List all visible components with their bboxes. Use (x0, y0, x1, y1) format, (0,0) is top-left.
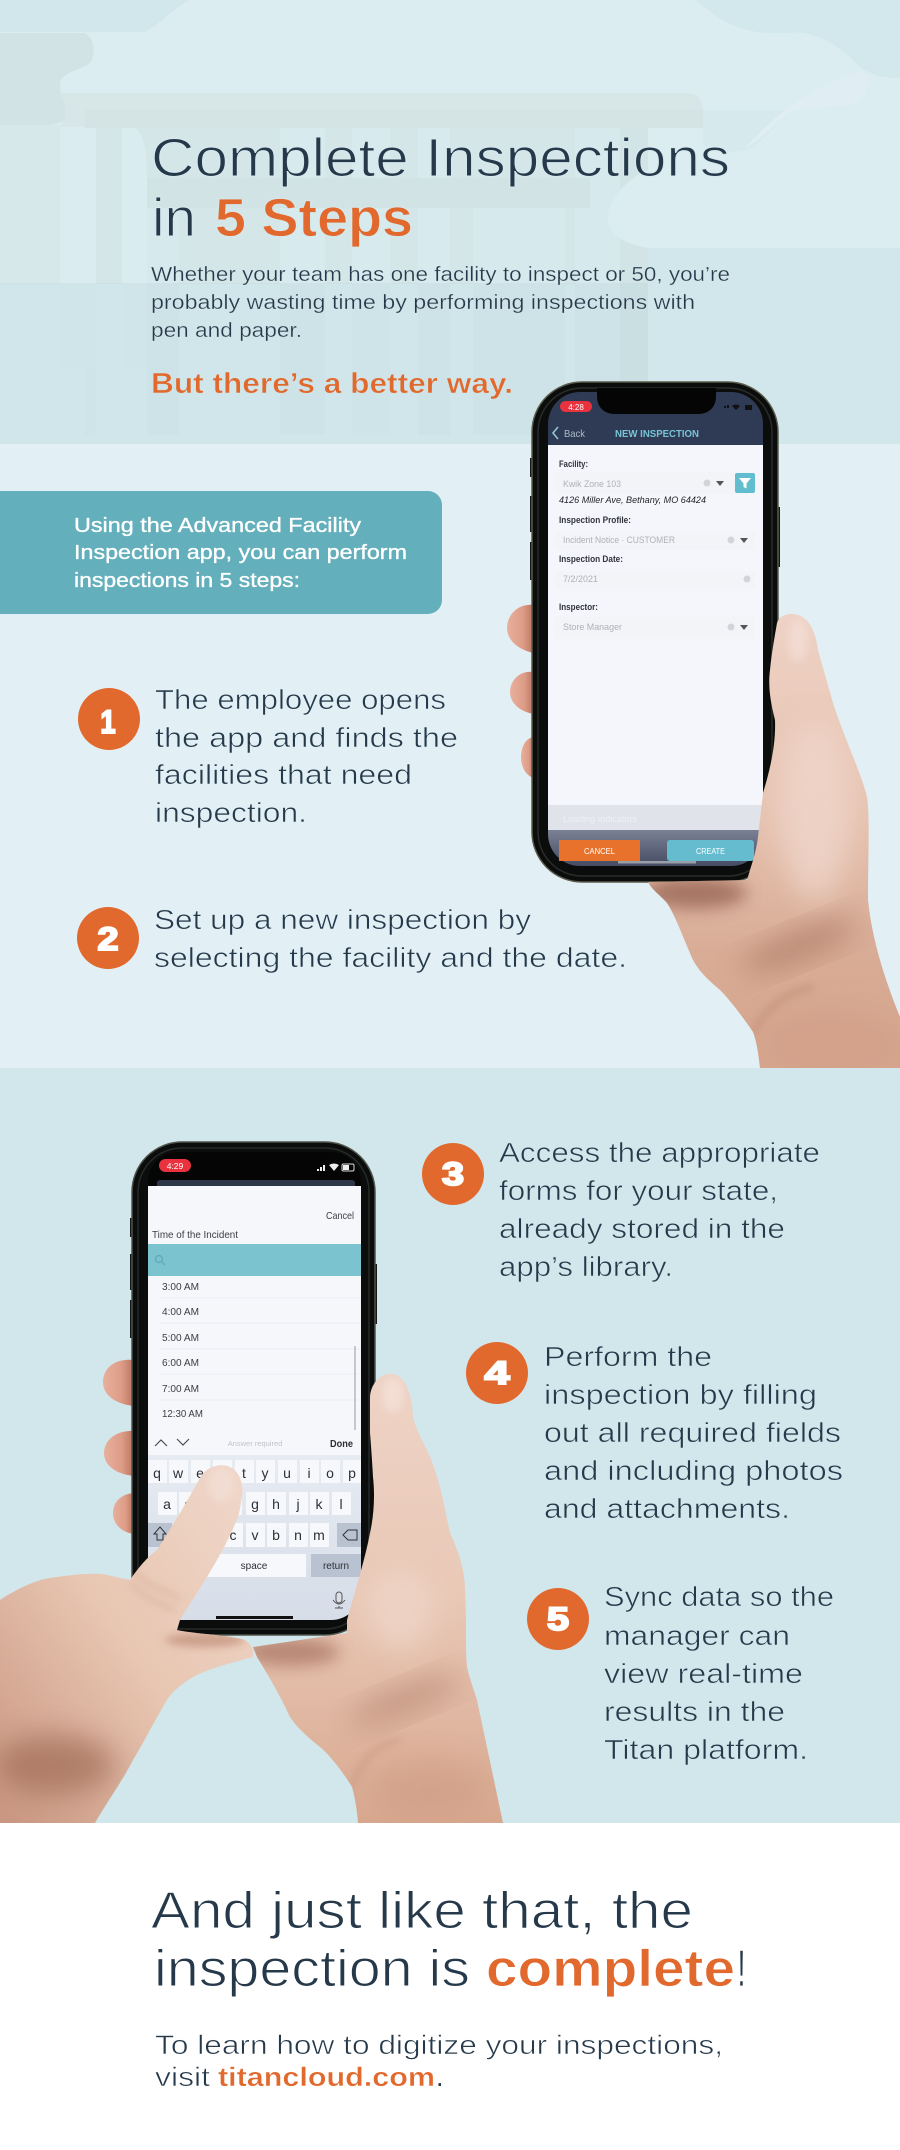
step 4: inspection by filling (544, 1379, 817, 1410)
step 1: facilities that need (155, 759, 412, 790)
intro paragraph: probably wasting time by performing inspections with (151, 291, 695, 314)
phone: time picker screen with keyboard: q (153, 1465, 161, 1481)
phone: new inspection screen: Incident Notice · CUSTOMER (563, 535, 675, 546)
call to action: To learn how to digitize your inspections, (155, 2030, 723, 2060)
title: in (152, 188, 196, 248)
callout: using the app: inspections in 5 steps: (74, 569, 300, 592)
callout: using the app: Inspection app, you can perform (74, 541, 407, 564)
phone: time picker screen with keyboard: m (313, 1527, 325, 1543)
phone: time picker screen with keyboard: w (172, 1465, 184, 1481)
phone: time picker screen with keyboard: 7:00 AM (162, 1383, 199, 1395)
step 4: out all required fields (544, 1417, 841, 1448)
phone: time picker screen with keyboard: v (252, 1527, 258, 1543)
phone: time picker screen with keyboard: b (272, 1527, 280, 1543)
phone: time picker screen with keyboard: n (294, 1527, 302, 1543)
phone: time picker screen with keyboard: c (230, 1527, 236, 1543)
phone: time picker screen with keyboard: d (206, 1496, 214, 1512)
closing headline: inspection is (154, 1940, 470, 1998)
phone: time picker screen with keyboard: return (323, 1561, 349, 1572)
panel: light section background (0, 444, 900, 1068)
phone: time picker screen with keyboard: r (220, 1465, 225, 1481)
subheading: but there's a better way: But there’s a better way. (151, 368, 513, 400)
step 4: and attachments. (544, 1493, 790, 1524)
step 1: 1 (100, 704, 116, 740)
step 1: inspection. (155, 797, 307, 828)
step 4 (466, 1341, 843, 1524)
title: Complete Inspections (151, 128, 730, 188)
icon: fingers behind first phone (507, 605, 534, 778)
call to action: visit (155, 2062, 211, 2092)
phone: new inspection screen: CREATE (696, 846, 725, 856)
phone: time picker screen with keyboard: 12:30 AM (162, 1408, 203, 1420)
call to action: . (436, 2062, 444, 2092)
phone: time picker screen with keyboard: k (316, 1496, 324, 1512)
phone: new inspection screen: 4:28 (568, 403, 584, 412)
phone: new inspection screen: 4126 Miller Ave, Bethany, MO 64424 (559, 495, 706, 506)
phone: new inspection screen: Facility: (559, 459, 588, 469)
closing headline (151, 1882, 746, 1998)
panel: header background with building illustration (0, 0, 900, 444)
phone: time picker screen with keyboard: l (339, 1496, 343, 1512)
step 4: 4 (484, 1355, 510, 1391)
phone: time picker screen with keyboard: 4:00 AM (162, 1306, 199, 1318)
phone: time picker screen with keyboard: t (242, 1465, 246, 1481)
phone: time picker screen with keyboard (130, 1142, 377, 1635)
title: 5 Steps (215, 188, 413, 248)
step 5: results in the (604, 1696, 785, 1727)
step 4: and including photos (544, 1455, 843, 1486)
phone: time picker screen with keyboard: 6:00 AM (162, 1357, 199, 1369)
phone: time picker screen with keyboard: g (251, 1496, 259, 1512)
step 3: Access the appropriate (499, 1137, 820, 1168)
step 2: Set up a new inspection by (154, 904, 531, 935)
phone: new inspection screen: Inspection Profile: (559, 515, 631, 525)
panel: teal section background (0, 1068, 900, 1823)
icon: fingers behind second phone (103, 1360, 134, 1534)
closing headline: complete (486, 1940, 735, 1998)
phone: time picker screen with keyboard: f (230, 1496, 234, 1512)
phone: time picker screen with keyboard: space (241, 1561, 268, 1572)
phone: time picker screen with keyboard: 5:00 AM (162, 1332, 199, 1344)
phone: time picker screen with keyboard: j (295, 1496, 300, 1512)
intro paragraph (151, 263, 730, 342)
phone: new inspection screen: Store Manager (563, 622, 622, 633)
intro paragraph: Whether your team has one facility to inspect or 50, you’re (151, 263, 730, 286)
icon: left hand pointing at keyboard (0, 1465, 253, 1823)
call to action (155, 2030, 723, 2092)
phone: new inspection screen: Back (564, 428, 586, 440)
phone: time picker screen with keyboard: p (348, 1465, 356, 1481)
step 2: selecting the facility and the date. (154, 942, 627, 973)
intro paragraph: pen and paper. (151, 319, 302, 342)
phone: time picker screen with keyboard: Done (330, 1438, 353, 1450)
phone: time picker screen with keyboard: Time of the Incident (152, 1229, 238, 1241)
phone: new inspection screen: CANCEL (584, 846, 615, 856)
closing headline: ! (737, 1940, 746, 1998)
step 5: 5 (547, 1601, 569, 1637)
phone: time picker screen with keyboard: y (262, 1465, 268, 1481)
step 2: 2 (98, 921, 118, 957)
step 5: view real-time (604, 1658, 803, 1689)
phone: time picker screen with keyboard: s (184, 1496, 192, 1512)
step 3: 3 (442, 1156, 464, 1192)
phone: time picker screen with keyboard: a (163, 1496, 171, 1512)
step 1: the app and finds the (155, 722, 458, 753)
title (151, 128, 730, 248)
phone: new inspection screen: NEW INSPECTION (615, 428, 699, 440)
step 3 (422, 1137, 820, 1282)
closing headline: And just like that, the (151, 1882, 693, 1940)
step 2 (77, 904, 627, 973)
step 3: already stored in the (499, 1213, 785, 1244)
phone: new inspection screen: Kwik Zone 103 (563, 479, 621, 490)
icon: hand holding first phone (643, 614, 900, 1070)
phone: new inspection screen: Inspector: (559, 602, 598, 612)
phone: time picker screen with keyboard: Answer required (228, 1439, 282, 1448)
step 5: Titan platform. (604, 1734, 808, 1765)
step 1 (78, 684, 458, 828)
icon: right hand holding second phone (240, 1374, 503, 1823)
step 1: The employee opens (155, 684, 446, 715)
step 3: forms for your state, (499, 1175, 778, 1206)
step 5 (527, 1581, 834, 1765)
step 3: app’s library. (499, 1251, 673, 1282)
phone: new inspection screen: 7/2/2021 (563, 574, 598, 585)
phone: time picker screen with keyboard: i (307, 1465, 311, 1481)
phone: time picker screen with keyboard: 3:00 AM (162, 1281, 199, 1293)
call to action: titancloud.com (218, 2062, 435, 2092)
step 5: Sync data so the (604, 1581, 834, 1612)
phone: time picker screen with keyboard: Cancel (326, 1210, 354, 1222)
step 4: Perform the (544, 1341, 712, 1372)
step 5: manager can (604, 1620, 790, 1651)
phone: time picker screen with keyboard: h (272, 1496, 280, 1512)
callout: using the app: Using the Advanced Facility (74, 514, 362, 537)
phone: time picker screen with keyboard: 4:29 (167, 1161, 184, 1171)
panel: white footer background (0, 1823, 900, 2150)
phone: new inspection screen: Loading Indicators (563, 814, 637, 824)
phone: time picker screen with keyboard: u (283, 1465, 291, 1481)
phone: new inspection screen (530, 382, 780, 882)
callout: using the app (0, 491, 442, 614)
phone: new inspection screen: Inspection Date: (559, 554, 623, 564)
phone: time picker screen with keyboard: o (326, 1465, 334, 1481)
phone: time picker screen with keyboard: e (196, 1465, 204, 1481)
